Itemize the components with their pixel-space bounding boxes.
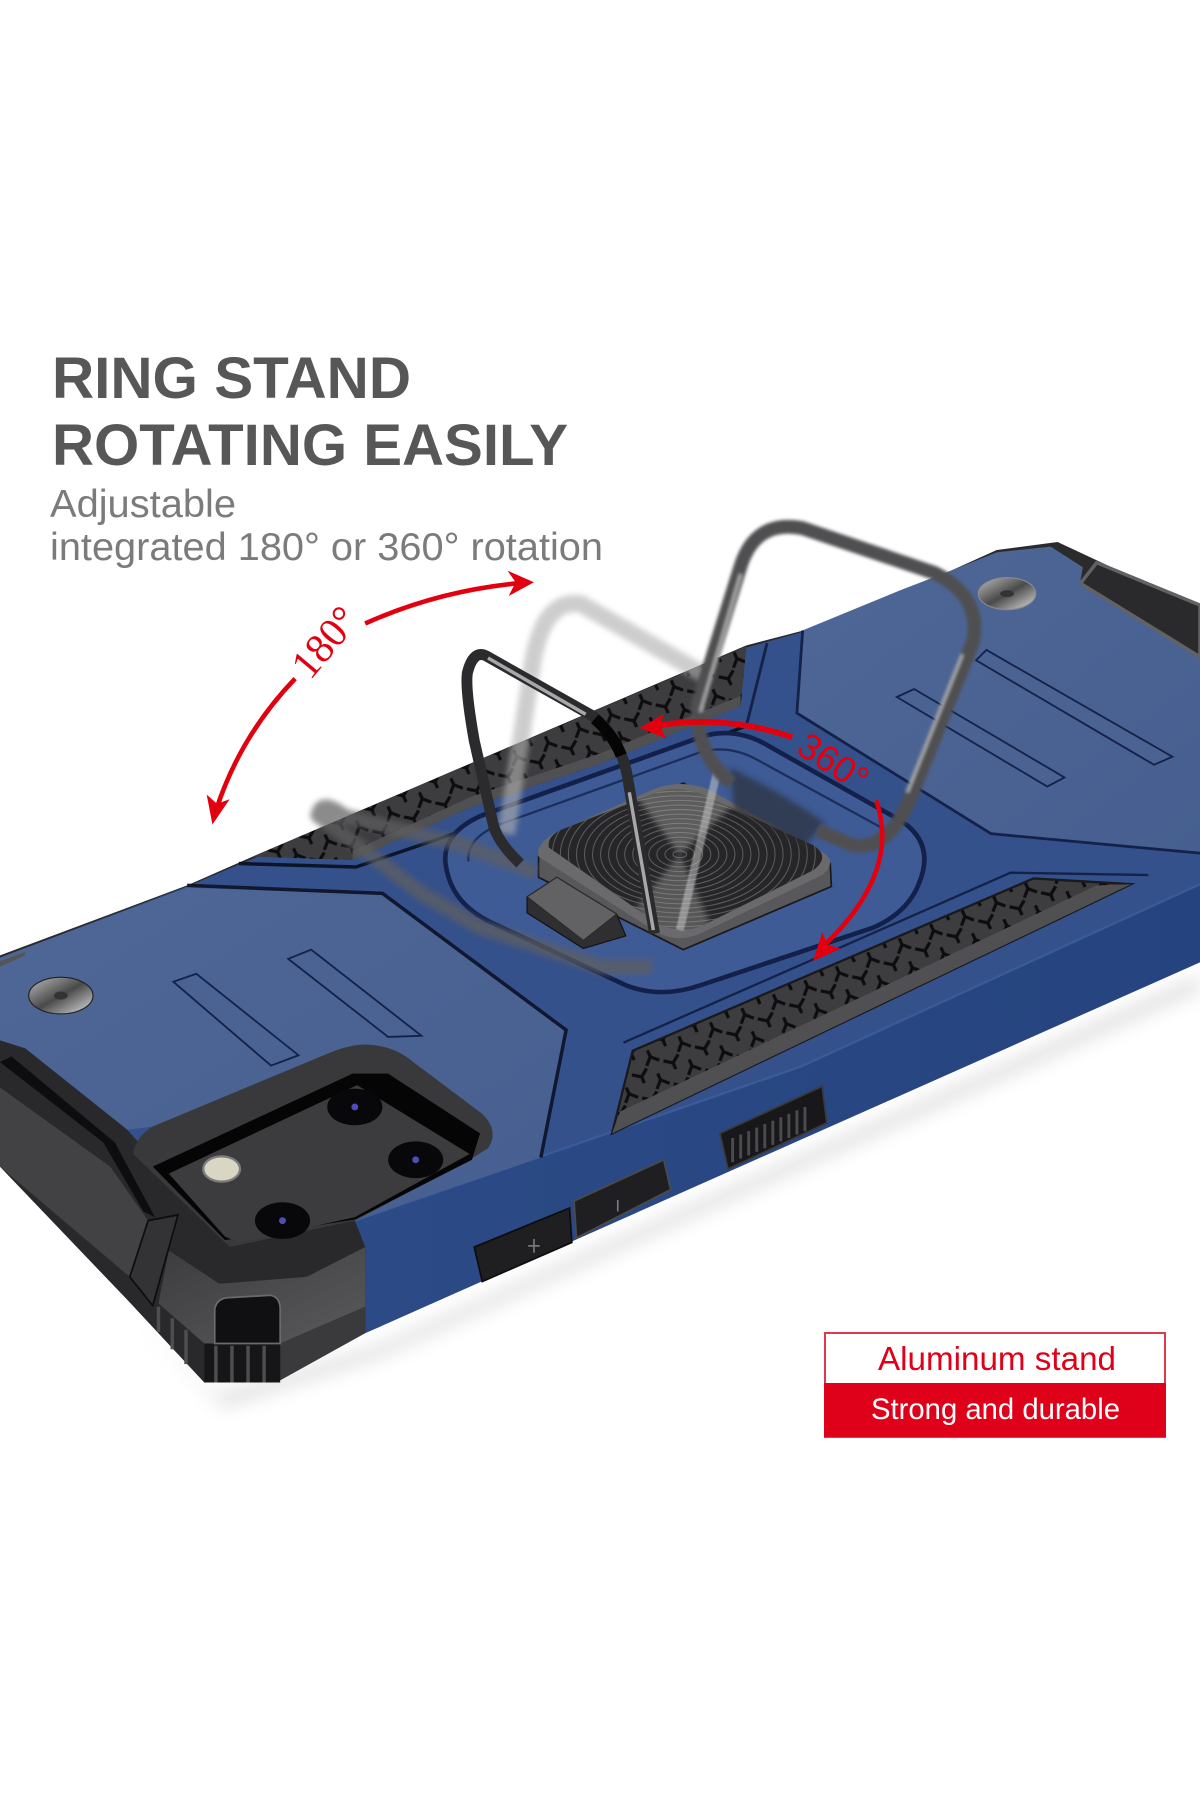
- corner panel: [158, 1247, 365, 1344]
- drop shadow under phone: [138, 976, 1200, 1407]
- lens top: [327, 1089, 382, 1125]
- camera inner recess: [153, 1074, 480, 1240]
- subtitle line one: Adjustable: [50, 483, 236, 526]
- title: [52, 346, 568, 478]
- callout bottom panel: [824, 1383, 1166, 1437]
- left slot two: [288, 950, 421, 1037]
- lens glints: [282, 1107, 416, 1221]
- bumper side panel: [0, 1087, 148, 1277]
- base plate face: [549, 789, 822, 930]
- large blurred ring: [698, 527, 974, 846]
- tread lip: [353, 696, 741, 860]
- blue back strap: [0, 632, 1200, 1244]
- ring silver highlights: [488, 658, 653, 930]
- flat blurred ring: [318, 807, 652, 967]
- small bumper chip: [0, 952, 25, 967]
- big ring highlight: [700, 574, 962, 792]
- tread lower lip: [612, 884, 1131, 1133]
- lens right: [388, 1141, 443, 1178]
- flash: [203, 1156, 240, 1182]
- callout top panel: [825, 1333, 1165, 1437]
- ghost leg through disc: [680, 769, 718, 930]
- subtitle text: [50, 483, 603, 569]
- blue side wall: [355, 884, 1200, 1333]
- plate dark edge: [797, 630, 1200, 853]
- base plate rim: [538, 784, 830, 938]
- corner ridges: [158, 1307, 264, 1383]
- lower tread grip: [612, 873, 1148, 1133]
- title line two: ROTATING EASILY: [52, 413, 568, 478]
- arrow: 360 degree lower arc: [813, 800, 882, 961]
- callout: aluminum stand: [824, 1333, 1166, 1437]
- corner vertical strip: [130, 1215, 178, 1306]
- brushed concentric disc: [552, 790, 816, 928]
- left slot one: [173, 974, 299, 1066]
- lower left back plate: [0, 885, 566, 1244]
- label: 360 degrees: 360°: [790, 724, 876, 800]
- tread end outline: [746, 643, 767, 726]
- upper right bumper: [1081, 563, 1200, 657]
- hinge block: [527, 877, 626, 948]
- light ghost ring: [506, 603, 718, 930]
- screw bottom left: [29, 977, 93, 1014]
- camera glass: [169, 1085, 470, 1242]
- ring recess: [445, 733, 924, 992]
- right slot two: [976, 650, 1172, 765]
- volume up button: [474, 1208, 572, 1282]
- plate dark edge: [187, 885, 566, 1157]
- upper right shadow on disc: [729, 767, 824, 847]
- inner recess line: [468, 749, 884, 861]
- ring black segment: [595, 719, 621, 756]
- upper right back plate: [797, 547, 1200, 853]
- camera module: [133, 1044, 493, 1247]
- tread bevel outline: [624, 873, 1148, 1043]
- phone case illustration: [0, 527, 1200, 1407]
- right slot one: [897, 689, 1064, 787]
- side ridge highlight: [355, 884, 1200, 1221]
- title line one: RING STAND: [52, 346, 411, 411]
- label: 180 degrees: 180°: [282, 597, 367, 687]
- disc light wedges: [634, 790, 732, 930]
- lower left bumper: [0, 1040, 365, 1383]
- volume down button: [574, 1160, 671, 1238]
- arrow: 180 degree upper arc: [365, 571, 534, 624]
- bottom face: [280, 1307, 365, 1380]
- callout subheading: Strong and durable: [871, 1393, 1120, 1426]
- charging port: [215, 1295, 280, 1344]
- metal ring base: [527, 767, 831, 950]
- arrow: 180 degree lower arc: [207, 679, 295, 824]
- arrow: 360 degree upper arc: [640, 714, 792, 738]
- lens bottom: [255, 1202, 310, 1239]
- base plate thickness: [539, 783, 831, 950]
- upper tread grip: [239, 643, 767, 867]
- subtitle line two: integrated 180° or 360° rotation: [50, 526, 603, 569]
- bottom black band: [204, 1344, 280, 1383]
- bumper upper band: [0, 1056, 155, 1217]
- case silhouette: [0, 542, 1200, 1383]
- power button: [720, 1086, 827, 1169]
- strip line under tread: [239, 726, 746, 867]
- callout heading: Aluminum stand: [878, 1340, 1116, 1377]
- sharp front ring: [467, 655, 655, 934]
- screw top right: [978, 578, 1036, 610]
